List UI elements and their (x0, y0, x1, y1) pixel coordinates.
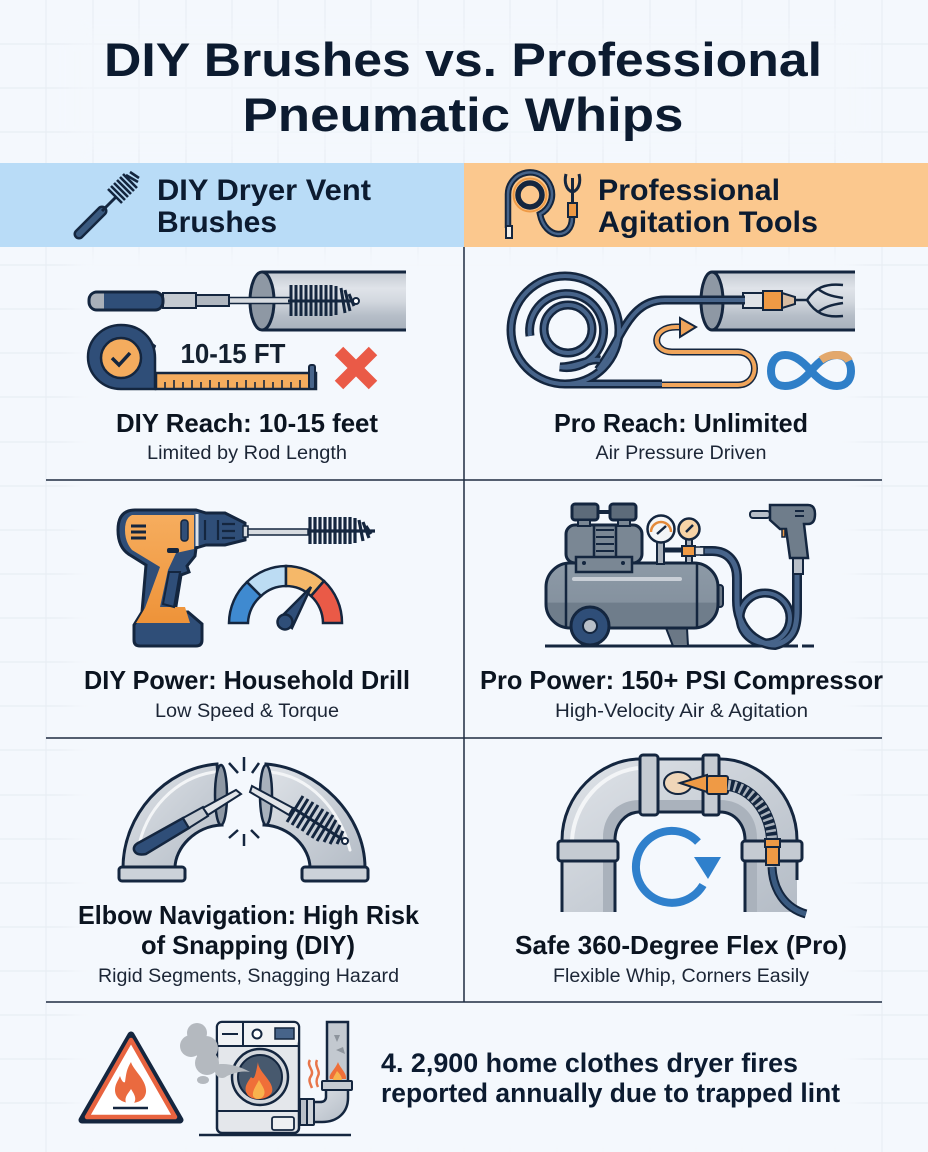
title: DIY Brushes vs. Professional (104, 33, 822, 86)
heading: DIY Dryer Vent Brushes: Brushes (157, 206, 277, 239)
caption: Pro reach: Pro Reach: Unlimited (554, 408, 808, 438)
icon: cordless drill with brush (118, 510, 375, 646)
caption: DIY power (84, 665, 410, 722)
label: 10-15 FT: 10-15 FT (180, 338, 286, 369)
caption: DIY elbow: Elbow Navigation: High Risk (78, 900, 420, 930)
icon: coiled hose (511, 276, 745, 384)
caption: DIY elbow: of Snapping (DIY) (141, 930, 355, 960)
icon: burning dryer (199, 1022, 351, 1135)
caption: Pro reach: Air Pressure Driven (596, 443, 766, 464)
caption: Pro reach (554, 408, 808, 464)
statistic text (381, 1048, 840, 1108)
icon: arched pipe (558, 755, 802, 912)
icon: fire warning triangle (82, 1035, 180, 1120)
heading: Professional Agitation Tools (598, 174, 818, 239)
caption: DIY power: DIY Power: Household Drill (84, 665, 410, 695)
caption: DIY reach (116, 408, 378, 464)
icon: pressure gauges (648, 516, 700, 564)
panel: Pro power (480, 504, 883, 722)
caption: Pro power: High-Velocity Air & Agitation (555, 701, 808, 722)
heading: DIY Dryer Vent Brushes (157, 174, 371, 239)
caption: DIY reach: DIY Reach: 10-15 feet (116, 408, 378, 438)
panel: DIY power (84, 510, 410, 722)
panel: DIY column header (0, 163, 464, 247)
title (104, 33, 822, 141)
icon: red X (339, 351, 373, 385)
caption: DIY reach: Limited by Rod Length (147, 443, 347, 464)
heading: Professional Agitation Tools: Agitation Tools (598, 206, 818, 239)
caption: Pro power (480, 665, 883, 722)
panel: Pro reach (511, 272, 855, 464)
heading: DIY Dryer Vent Brushes: DIY Dryer Vent (157, 174, 371, 207)
panel: Pro column header (464, 163, 928, 247)
caption: Pro flex (515, 930, 847, 987)
caption: DIY elbow (78, 900, 420, 987)
icon: speed gauge (229, 566, 342, 630)
panel: Pro flex (515, 755, 847, 987)
icon: flexible whip with orange fitting (664, 772, 806, 914)
caption: Pro flex: Safe 360-Degree Flex (Pro) (515, 930, 847, 960)
title: Pneumatic Whips (242, 88, 684, 141)
panel: DIY elbow (78, 757, 420, 987)
icon: snap sparks (229, 757, 259, 846)
caption: Pro flex: Flexible Whip, Corners Easily (553, 966, 810, 987)
heading: Professional Agitation Tools: Professional (598, 174, 780, 207)
statistic text: 4. 2,900 home clothes dryer fires (381, 1048, 798, 1078)
icon: vent pipe with flames (300, 1022, 352, 1125)
statistic text: reported annually due to trapped lint (381, 1078, 840, 1108)
icon: brush rod in vent pipe (89, 272, 406, 330)
icon: smoke cloud (180, 1023, 250, 1084)
icon: hose and air gun (682, 505, 815, 645)
icon: blue rotation arrow (636, 831, 721, 903)
caption: DIY elbow: Rigid Segments, Snagging Hazard (98, 966, 399, 987)
icon: left elbow with snapped rod (119, 764, 241, 881)
panel: DIY reach (88, 272, 406, 464)
caption: Pro power: Pro Power: 150+ PSI Compressor (480, 665, 883, 695)
panel: fire statistic footer (82, 1022, 840, 1135)
icon: infinity symbol (771, 355, 851, 386)
icon: right elbow with broken brush (250, 764, 368, 881)
icon: air compressor (545, 504, 814, 646)
icon: dryer vent brush (79, 172, 139, 234)
icon: whip in vent pipe (701, 272, 855, 330)
icon: orange routing arrow (657, 318, 754, 385)
icon: tape measure (88, 325, 316, 389)
caption: DIY power: Low Speed & Torque (155, 701, 339, 722)
icon: coiled hose whip (506, 172, 580, 238)
